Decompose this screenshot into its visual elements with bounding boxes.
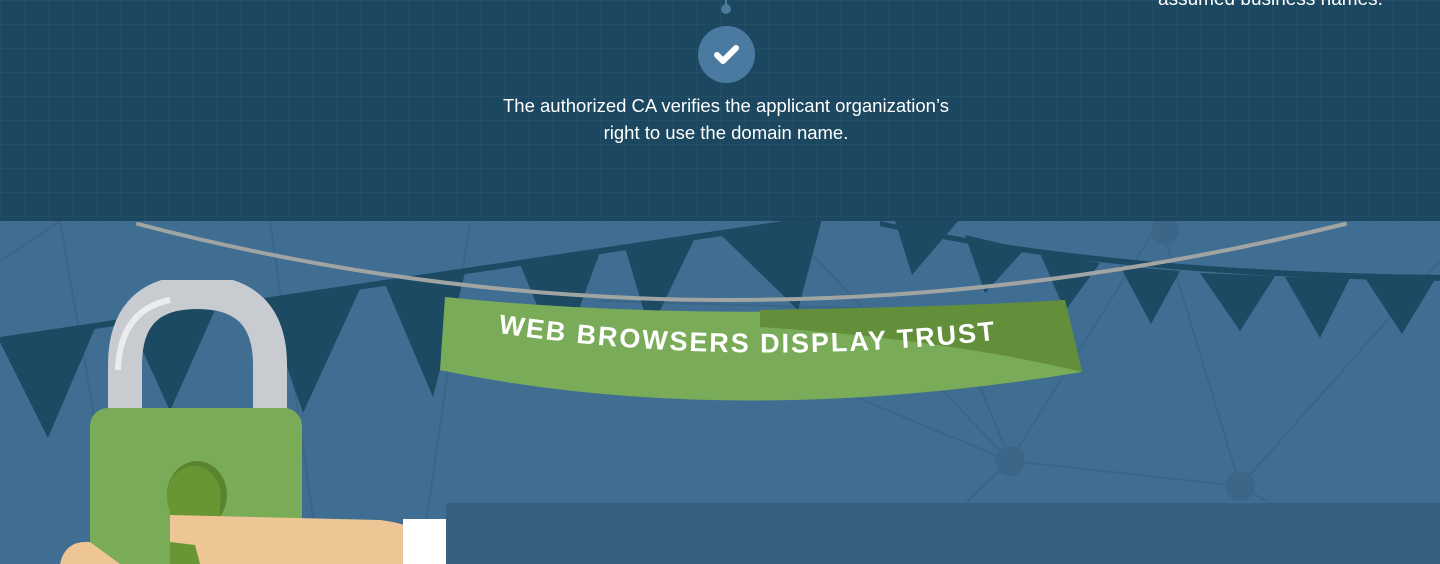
connector dot [721, 0, 731, 14]
icon: padlock with hand [60, 280, 403, 564]
text: step description: The authorized CA verifies the applicant organization’s [503, 95, 949, 116]
panel: bottom text box [446, 503, 1440, 564]
banner: web browsers display trust [440, 297, 1082, 400]
wire [138, 224, 1345, 300]
banner: web browsers display trust: WEB BROWSERS DISPLAY TRUST [500, 314, 994, 353]
background network, bunting, wire [0, 221, 1440, 519]
bunting left [0, 217, 822, 438]
text: step description [503, 95, 949, 143]
panel: top verification step [0, 0, 1440, 221]
bunting right [880, 221, 1440, 338]
text: step description: right to use the domain name. [604, 122, 848, 143]
white strip [403, 519, 447, 564]
icon: check circle [698, 26, 755, 83]
